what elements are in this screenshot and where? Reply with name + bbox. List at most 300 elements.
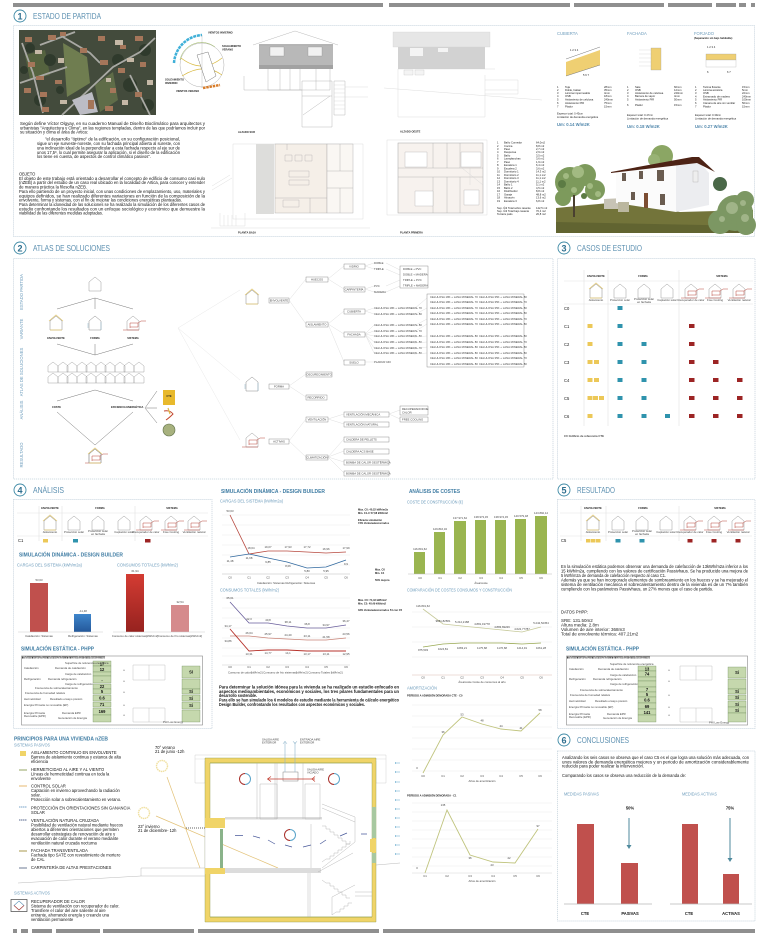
room schedule: 11,1 m2 <box>536 173 546 177</box>
bar chart: coste de construccion: COSTE DE CONSTRUCCIÓN (€) <box>407 500 464 504</box>
room schedule: 11,1 m2 <box>536 176 546 180</box>
case matrix: Aislamiento <box>589 298 604 302</box>
case C1 matrix: ENVOLVENTE <box>41 506 59 510</box>
line chart: cargas del sistema: 9,85 <box>265 560 271 564</box>
section heading 5: RESULTADO <box>577 485 615 495</box>
legend: pasive systems: solar. <box>31 792 41 798</box>
line chart: consumos totales: 42,3 <box>246 617 252 621</box>
air circulation symbols <box>240 774 340 840</box>
PHPP table: Superficie de referencia energética <box>610 662 654 666</box>
room schedule: 2,9 m2 <box>536 150 545 154</box>
construction detail: forjado: 22mm <box>742 91 750 95</box>
construction detail: fachada: Um: 0.18 W/m2K <box>627 124 660 129</box>
body text: intro and objeto: su situación y clima el área de Artica: <box>20 130 88 135</box>
side stage labels <box>19 274 24 467</box>
line chart: cargas del sistema: 17,93 <box>284 545 292 549</box>
aerial photo <box>19 30 156 115</box>
solution flow diagram: SISTEMA <box>127 336 139 340</box>
atlas tree: envolvente: FACHADA <box>347 333 361 337</box>
legend: recuperador de calor: entrante, ahorrando energía y creando una <box>31 912 110 918</box>
heading: ANÁLISIS DE COSTES <box>409 488 460 495</box>
construction detail: forjado: 50mm <box>742 101 750 105</box>
atlas tree: envolvente: CELULOSA 35K + LANA MINERAL 80 <box>479 295 527 299</box>
panel: analisis de costes <box>407 488 552 883</box>
PHPP table: 7 <box>646 687 649 692</box>
line chart: consumos totales: 34,86 <box>224 639 232 643</box>
bar chart: coste de construccion: 140.579,48 <box>514 514 528 518</box>
room schedule: 13 <box>497 180 500 184</box>
construction detail: fachada: Aislamiento PIR <box>635 98 654 102</box>
room schedule: Escalera 2 <box>504 166 517 170</box>
bar chart: consumos totales: 32,54 <box>176 600 184 604</box>
case C1 matrix: Ventilación natural <box>183 530 206 534</box>
atlas tree: envolvente: DOBLE + PVC <box>403 267 421 271</box>
datos PHPP: Altura media: 2.8m <box>561 622 599 628</box>
construction detail: cubierta: 75mm <box>604 101 612 105</box>
line chart: cargas del sistema: C3 <box>285 576 289 580</box>
construction detail: cubierta: Pladur <box>565 104 573 108</box>
section heading 3: 3 <box>561 243 567 253</box>
line chart: cargas del sistema: 9,9 <box>344 562 348 566</box>
section heading 2: ATLAS DE SOLUCIONES <box>33 243 110 253</box>
sun path diagram: VIENTOS INVIERNO <box>208 30 233 34</box>
room schedule: Terraza patio <box>497 212 513 216</box>
construction detail: fachada: OSB <box>635 88 641 92</box>
line chart: consumos totales: 65,61 <box>226 596 234 600</box>
case matrix: Ventilación natural <box>728 298 751 302</box>
bar chart: medidas pasivas <box>564 792 652 916</box>
line chart: cargas del sistema: 18,64 <box>248 546 255 550</box>
panel: simulacion dinamica charts <box>219 487 403 707</box>
room schedule: Cocina <box>504 144 513 148</box>
PHPP table: Demanda EPR <box>62 711 81 715</box>
body text: intro and objeto: OBJETO <box>19 172 35 176</box>
line chart: comparacion de costes: 5.212,2188 <box>455 620 469 624</box>
first floor plan: ALZADO OESTE <box>400 130 421 134</box>
south elevation drawing <box>244 31 368 127</box>
ground floor plan: PLANTA BAJA <box>238 230 256 234</box>
sun positions and rays: 21 de diciembre- 12h <box>138 828 177 833</box>
construction detail: forjado: 240mm <box>742 94 752 98</box>
room schedule: 12 <box>497 176 500 180</box>
PHPP table: 0.6 <box>644 698 651 702</box>
case C5 matrix: Captación solar <box>656 530 676 534</box>
line chart: consumos totales: 26,64 <box>246 631 253 635</box>
room schedule: 48,8 m2 <box>536 192 546 196</box>
atlas tree: envolvente: CARPINTERÍA <box>345 288 364 292</box>
room schedule: Despensa <box>504 150 517 154</box>
line chart: cargas del sistema: 17,72 <box>304 545 311 549</box>
room schedule: Baño Comedor <box>504 140 522 144</box>
heading: simulacion dinamica: SIMULACIÓN DINÁMICA - DESIGN BUILDER <box>19 550 123 558</box>
line chart: amortizacion C1: 23 <box>490 863 494 867</box>
construction detail: forjado: 6 <box>707 70 709 74</box>
sun path diagram <box>165 30 241 93</box>
line chart: comparacion de costes: 1083,21 <box>457 646 467 650</box>
PHPP table: Generación de Energía <box>58 716 87 720</box>
legend: pasive systems: SOLAR <box>31 810 45 815</box>
room schedule: Dormitorio 1 <box>504 170 519 174</box>
atlas tree: envolvente: CELULOSA 35K + LANA MINERAL 80 <box>479 311 527 315</box>
bar chart: cargas del sistema: Refrigeración: Sistemas <box>68 634 98 638</box>
construction detail: forjado: 15mm <box>742 85 750 89</box>
atlas tree: envolvente: TRIPLE + PVC <box>403 278 422 282</box>
PHPP table: PHI Low Energy <box>163 720 184 724</box>
line chart: amortizacion CTE: C6 <box>538 774 542 778</box>
line chart: comparacion de costes: C0 <box>421 676 425 680</box>
construction detail: fachada <box>627 31 684 129</box>
room schedule: 8 <box>497 163 499 167</box>
construction detail: cubierta: 3 <box>557 91 559 95</box>
construction detail: cubierta: Teja <box>565 85 570 89</box>
legend: pasive systems: AISLAMIENTO CONTINUO EN ENVOLVENTE <box>31 750 117 755</box>
room schedule: Paso <box>504 160 511 164</box>
construction detail: cubierta: Limitación de demanda energética <box>557 115 599 119</box>
PHPP table: Calefacción <box>569 667 584 671</box>
construction detail: fachada: 6 <box>627 103 629 107</box>
construction detail: cubierta: 4 <box>557 94 559 98</box>
datos PHPP: SRE: 131.50m2 <box>561 618 593 623</box>
construction detail: cubierta: 15mm <box>604 104 612 108</box>
room schedule: 11,1 m2 <box>536 180 546 184</box>
body text: intro and objeto: los tiene en cuenta, de aspectos de control climático pasivos". <box>37 154 151 159</box>
paragraph: resultado: Además ya que se han incorporado elementos de sombreamiento en los huecos y se ha mejorado el <box>561 578 748 582</box>
section heading 1 <box>14 10 101 22</box>
line chart: cargas del sistema <box>220 498 390 585</box>
case C5 matrix <box>560 506 752 543</box>
construction detail: cubierta: 35mm <box>604 88 612 92</box>
PHPP table: Valores específicos referenciados a la superficie de referencia energética <box>568 656 659 660</box>
construction detail: cubierta: 240mm <box>604 98 614 102</box>
room schedule: Garaje <box>504 192 513 196</box>
PHPP table: ≥ <box>123 713 125 717</box>
atlas tree: envolvente: CELULOSA 18K + LANA MINERAL 70 <box>374 306 422 310</box>
section heading 2: 2 <box>17 243 23 253</box>
PHPP table: 69 <box>645 704 650 709</box>
line chart: comparacion de costes: Área/coste Coste de consumos al año <box>458 680 506 684</box>
PHPP table: Resultado ensayo presión <box>595 699 628 703</box>
heading: simulacion estatica: SIMULACIÓN ESTÁTICA - PHPP <box>566 644 639 652</box>
paragraph: conclusiones: Comparando los casos se observa una reducción de la demanda de: <box>562 773 686 778</box>
line chart: amortizacion C1: 22 <box>507 856 511 860</box>
construction detail: forjado: 5mm <box>742 88 749 92</box>
construction detail: fachada: Limitación de demanda energética <box>627 116 669 120</box>
heading: simulacion estatica: SIMULACIÓN ESTÁTICA - PHPP <box>21 644 94 652</box>
construction detail: forjado: Espesor total: 0.39cm <box>695 113 722 117</box>
legend: pasive systems: abiertos a diferentes orientaciones que permiten <box>31 827 119 832</box>
line chart: consumos totales: 33% Ventanales/cerrados 54 con C5 <box>358 608 403 612</box>
paragraph: metodologia <box>219 684 400 707</box>
line chart: amortizacion CTE: C5 <box>519 774 523 778</box>
PHPP table: Frecuencia de humedad relativa <box>570 693 610 697</box>
line chart: cargas del sistema: C2 <box>266 576 270 580</box>
case C1 matrix: C1 <box>18 538 24 543</box>
solution flow diagram: COSTE <box>52 405 61 409</box>
PHPP table: Frecuencia de humedad relativa <box>25 691 65 695</box>
line chart: comparacion de costes: 4.881,19778 <box>474 622 490 626</box>
atlas tree: envolvente: CUBIERTA <box>347 310 361 314</box>
bar chart: medidas pasivas: PASIVAS <box>621 911 639 916</box>
construction detail: fachada: 2 <box>627 88 629 92</box>
panel: estado de partida <box>14 10 756 236</box>
case matrix: C0 <box>564 306 570 311</box>
paragraph: conclusiones: unos valores de demanda energética mejores y un periodo de amortización considerablemente <box>562 759 750 764</box>
body text: intro and objeto <box>19 121 206 216</box>
construction detail: cubierta: 1 2 3 4 <box>570 48 579 52</box>
room schedule: 3 <box>497 147 499 151</box>
atlas tree: forma: FORMA <box>274 385 284 389</box>
room schedule: 2 <box>497 144 499 148</box>
PHPP table: - <box>101 678 103 683</box>
line chart: cargas del sistema: 11,68 <box>246 556 253 560</box>
legend: pasive systems: PROTECCIÓN EN ORIENTACIONES SIN GANANCIA <box>31 806 131 810</box>
PHPP table: ≤ <box>123 668 125 672</box>
legend: pasive systems: evacuación de calor durante el verano mediante <box>31 836 119 841</box>
line chart: consumos totales: 36,47 <box>342 619 350 623</box>
atlas tree: envolvente: CELULOSA 18K + LANA MINERAL 80 <box>374 312 422 316</box>
line chart: amortizacion CTE: 0 <box>416 766 418 770</box>
building render <box>555 145 756 235</box>
construction detail: fachada: Aislamiento de celulosa <box>635 91 664 95</box>
construction detail: cubierta: OSB <box>565 94 571 98</box>
body text: intro and objeto: una inclinación ideal de la perpendicular a esta fachada respecto al eje sur de <box>37 145 181 150</box>
line chart: amortizacion CTE: 48 <box>480 718 484 722</box>
atlas tree: envolvente: CELULOSA 18K + LANA MINERAL 70 <box>430 295 478 299</box>
panel: atlas de soluciones <box>14 242 553 479</box>
section heading 6 <box>558 734 629 746</box>
case matrix: C6 <box>564 414 570 419</box>
sun path diagram: SOLEAMIENTO <box>165 78 184 82</box>
room schedule: Distribuidor <box>504 189 518 193</box>
line chart: cargas del sistema: C4 <box>305 576 309 580</box>
case C5 matrix: Aislamiento <box>586 530 601 534</box>
atlas tree: envolvente: CELULOSA 18K + LANA MINERAL 80 <box>430 334 478 338</box>
atlas tree: envolvente: CELULOSA 18K + LANA MINERAL 70 <box>430 322 478 326</box>
line chart: consumos totales: C4 <box>305 665 309 669</box>
legend: recuperador de calor: Sistema de ventilación con recuperador de calor. <box>31 904 120 908</box>
paragraph: metodologia: Para determinar la solución idónea para la vivienda se ha realizado un estudio enfocado en <box>219 684 400 690</box>
sun path diagram: VERANO <box>222 48 233 52</box>
side stage labels: RESULTADO <box>19 442 24 467</box>
line chart: consumos totales: 23,56 <box>342 632 350 636</box>
line chart: cargas del sistema: 73% Ventanales/cerrados <box>358 521 390 525</box>
atlas tree: envolvente: ENVOLVENTE <box>270 299 288 303</box>
line chart: consumos totales: 12,95 <box>342 652 350 656</box>
case matrix: C3 <box>564 360 570 365</box>
legend: pasive systems: envolvente <box>31 776 52 781</box>
construction detail: cubierta: Um: 0.14 W/m2K <box>557 122 590 127</box>
case C1 matrix: FORMA <box>95 506 105 510</box>
PHPP table: ≤ <box>668 668 670 672</box>
atlas tree: envolvente: CELULOSA 18K + LANA MINERAL 70 <box>430 317 478 321</box>
atlas tree: activas: BOMBA DE CALOR GEOTÉRMICA <box>346 471 391 476</box>
line chart: cargas del sistema: Máx. C0: 40,22 kWh/m2a <box>358 508 389 512</box>
case matrix: ENVOLVENTE <box>587 274 605 278</box>
construction detail: fachada: FACHADA <box>627 31 647 36</box>
top bar <box>13 3 755 7</box>
case C1 matrix: Free Cooling <box>163 530 179 534</box>
bar chart: coste de construccion: C2 <box>458 576 462 580</box>
line chart: comparacion de costes: COMPARACIÓN DE COSTES CONSUMOS Y CONSTRUCCIÓN <box>407 588 512 592</box>
case C5 matrix: Protección solar <box>632 529 652 533</box>
PHPP table: PHI Low Energy <box>709 720 730 724</box>
line chart: consumos totales: 13,31 <box>246 652 253 656</box>
construction detail: cubierta: Espesor total: 0.45cm <box>557 112 584 116</box>
PHPP table: 13 <box>645 666 650 672</box>
construction detail: cubierta: 5 <box>557 98 559 102</box>
construction detail: cubierta: 28mm <box>604 85 612 89</box>
paragraph: resultado: sistema de ventilación mecánica el sobrecalentamiento dentro de la vivienda es de un 7% también <box>561 582 749 587</box>
bar chart: coste de construccion: C5 <box>519 576 523 580</box>
line chart: amortizacion C1: C6 <box>536 874 540 878</box>
line chart: cargas del sistema: C0 <box>228 576 232 580</box>
bar chart: coste de construccion: C3 <box>479 576 483 580</box>
bar chart: consumos totales: Consumo de frío sistemas[kWh/m2] <box>158 634 202 638</box>
PHPP table: Calefacción <box>24 666 39 670</box>
line chart: comparacion de costes: C4 <box>500 676 504 680</box>
atlas tree: envolvente: CELULOSA 18K + LANA MINERAL 80 <box>374 340 422 344</box>
construction detail: forjado: 1 <box>695 85 697 89</box>
PHPP table: Hermeticidad <box>569 699 586 703</box>
line chart: comparacion de costes: C6 <box>539 676 543 680</box>
body text: intro and objeto: urbanistas "Arquitectura y Clima", en las regiones templadas, dentro de las que podríamos incluir por <box>20 125 206 130</box>
legend: pasive systems: Barrera de aislamiento continua y estanca de alta <box>31 754 122 760</box>
bar chart: medidas pasivas: 50% <box>626 806 634 810</box>
construction detail: forjado: 7 <box>695 104 697 108</box>
line chart: amortizacion CTE: C4 <box>499 774 503 778</box>
line chart: comparacion de costes: 975,503 <box>418 648 428 652</box>
atlas tree: envolvente: CELULOSA 35K + LANA MINERAL 80 <box>479 345 527 349</box>
line chart: amortizacion CTE: 58 <box>538 708 542 712</box>
line chart: cargas del sistema: 5,80 <box>304 569 310 573</box>
line chart: consumos totales: CONSUMOS TOTALES (kWh/m2) <box>220 588 280 592</box>
atlas tree: envolvente: HUECOS <box>311 278 323 282</box>
construction detail: fachada: 4mm <box>674 94 681 98</box>
line chart: amortizacion C1: PERÍODO A ADMISIÓN DEMORADA - C1 <box>407 792 457 798</box>
PHPP table <box>566 656 748 725</box>
atlas tree: envolvente: CELULOSA 18K + LANA MINERAL 80 <box>430 351 478 355</box>
line chart: amortizacion CTE: 36 <box>441 730 445 734</box>
PHPP table: Renovable (EPR) <box>569 715 591 719</box>
line chart: consumos totales: 21,58 <box>322 635 330 639</box>
bar chart: coste de construccion: C4 <box>499 576 503 580</box>
construction detail: fachada: 50mm <box>674 98 682 102</box>
bar chart: medidas activas <box>670 792 752 916</box>
paragraph: resultado: En la simulación estática podemos observar una demanda de calefacción de 13kWh/m2a inferior a los <box>561 564 748 569</box>
atlas tree: envolvente: TRIPLE + MADERA <box>403 284 428 288</box>
room schedule: 3,6 m2 <box>536 166 545 170</box>
line chart: comparacion de costes <box>407 588 552 684</box>
PHPP table: ≤ <box>123 679 125 683</box>
room schedule: Sup. Útil Total bajo rasante <box>497 209 530 213</box>
line chart: amortizacion CTE: 53 <box>460 712 464 716</box>
legend: recuperador de calor <box>11 899 120 922</box>
case C5 matrix: ENVOLVENTE <box>584 506 602 510</box>
legend: pasive systems: CARPINTERÍA DE ALTAS PRESTACIONES <box>31 865 112 870</box>
construction detail: cubierta: 7 <box>557 104 559 108</box>
room schedule: Baño <box>504 154 511 158</box>
line chart: comparacion de costes: C1 <box>441 676 445 680</box>
line chart: comparacion de costes: 4.622,77787 <box>514 627 530 631</box>
construction detail: forjado: 4 <box>695 94 697 98</box>
legend: pasive systems: de CAL <box>31 857 45 862</box>
case matrix: Protección solar <box>610 298 630 302</box>
atlas tree: activas: VENTILACIÓN <box>308 417 326 422</box>
legend: pasive systems: FACHADA TRANSVENTILADA <box>31 848 88 853</box>
bar chart: medidas activas: ACTIVAS <box>722 911 740 916</box>
case C5 matrix: en fachada <box>635 532 649 536</box>
construction detail: fachada: 60mm <box>674 85 682 89</box>
room schedule: 14 <box>497 183 500 187</box>
line chart: cargas del sistema: Calefacción: Sistemas Refrigeración: Sistemas <box>257 581 316 585</box>
legend: pasive systems: Líneas de hermeticidad continua en toda la <box>31 772 110 776</box>
room schedule: 142,5 m2 <box>536 206 548 210</box>
panel: casos de estudio <box>558 242 755 479</box>
PHPP table: 141 <box>644 710 651 715</box>
bar chart: cargas del sistema <box>17 562 103 638</box>
body text: intro and objeto: (nZEB) a partir del estudio de un caso real ubicado en la localidad de Artica, para conocer y entender <box>19 180 206 185</box>
construction detail: fachada: 240mm <box>674 91 684 95</box>
line chart: consumos totales: 14,1 <box>285 651 291 655</box>
line chart: comparacion de costes: C5 <box>520 676 524 680</box>
construction detail: fachada: 4 <box>627 94 629 98</box>
line chart: amortizacion C1: 36 <box>468 856 472 860</box>
construction detail: forjado: Um: 0.27 W/m2K <box>695 124 728 129</box>
heading: SIMULACIÓN DINÁMICA - DESIGN BUILDER <box>221 487 325 495</box>
atlas tree: envolvente: CELULOSA 18K + LANA MINERAL 80 <box>374 323 422 327</box>
line chart: amortizacion C1: C3 <box>468 874 472 878</box>
line chart: amortizacion CTE: PERÍODO A ADMISIÓN DEMORADA CTE - C0 <box>407 692 463 698</box>
solution flow diagram: CTE <box>166 394 172 398</box>
room schedule: 3,5 m2 <box>536 154 545 158</box>
line chart: amortizacion CTE <box>407 686 552 783</box>
construction detail: fachada: Barrera de vapor <box>635 94 655 98</box>
construction detail: forjado: (Separación sin bajo habitable) <box>694 36 732 40</box>
first floor plan: PLANTA PRIMERA <box>400 230 423 234</box>
construction detail: cubierta: 6 <box>557 101 559 105</box>
PHPP table: Demanda EPR <box>607 712 626 716</box>
construction detail: cubierta: 1 <box>557 85 559 89</box>
body text: intro and objeto: envolvente, forma y sistemas, con el fin de mejorar las condiciones energéticas planteadas. <box>19 198 182 203</box>
bar chart: consumos totales: Consumo de calor sistemas[kWh/m2] <box>112 634 158 638</box>
PHPP table: Refrigeración <box>569 677 586 681</box>
room schedule: 2,7 m2 <box>536 147 545 151</box>
body text: intro and objeto: "el desarrollo "óptimo" de la edificación, en su configuración posicional, <box>45 136 180 142</box>
section heading 5 <box>558 484 615 496</box>
ventilation unit: VICIADO <box>307 770 319 774</box>
line chart: amortizacion CTE: 41 <box>519 726 523 730</box>
bar chart: consumos totales <box>112 562 205 638</box>
PHPP table: 22 <box>100 684 105 689</box>
bar chart: medidas activas: 75% <box>726 806 734 810</box>
PHPP table: Generación de Energía <box>603 716 632 720</box>
case C1 matrix: en fachada <box>91 532 105 536</box>
PHPP table: 5 <box>646 692 649 697</box>
atlas tree: envolvente: VIDRIO <box>349 265 360 269</box>
room schedule: 6,4 m2 <box>536 163 545 167</box>
body text: intro and objeto: sigue un eje surveste-noreste, con su fachada principal abierta al sureste, con <box>37 141 181 146</box>
line chart: cargas del sistema: Eficacia simulación <box>358 518 382 522</box>
atlas tree: envolvente: CELULOSA 18K + LANA MINERAL 80 <box>430 345 478 349</box>
line chart: amortizacion C1: C1 <box>423 874 427 878</box>
line chart: consumos totales: 13,11 <box>323 652 330 656</box>
paragraph: conclusiones: Analizando los seis casos se observa que el caso C5 es el que logra una solución más adecuada, con <box>562 755 750 760</box>
case C1 matrix: Recuperador de calor <box>133 530 160 534</box>
PHPP table: Demanda refrigeración <box>593 677 622 681</box>
atlas tree: activas: CALDERA DE PELLETS <box>346 438 377 442</box>
PHPP table: Sí <box>189 689 194 694</box>
construction detail: fachada: Sate <box>635 85 641 89</box>
